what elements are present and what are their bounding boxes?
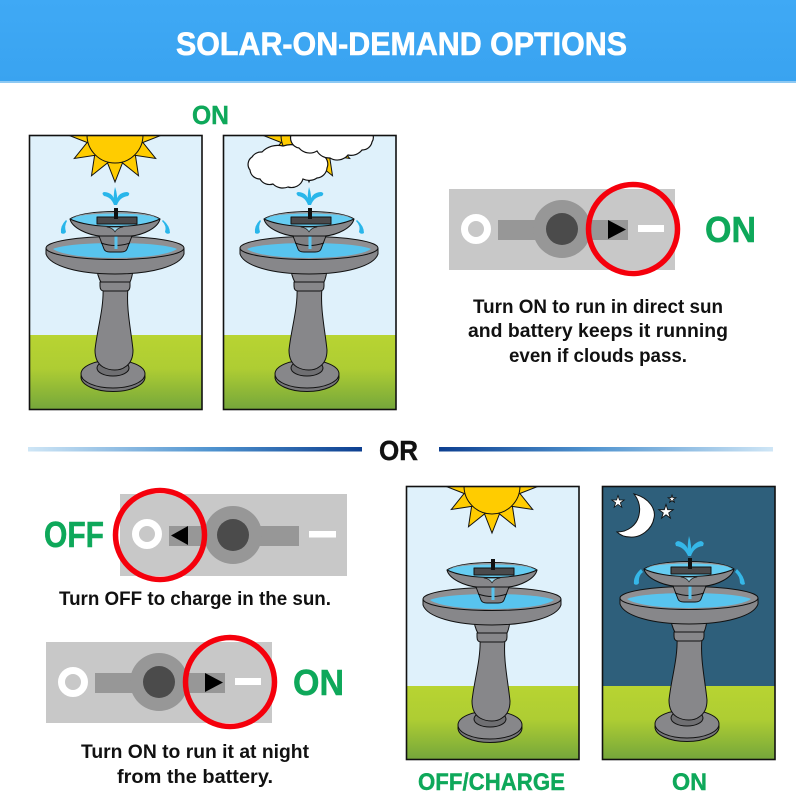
text block: direct sun instructions: Turn ON to run in direct sun bbox=[473, 297, 723, 318]
red highlight circle bbox=[186, 638, 274, 726]
divider: OR: OR bbox=[379, 435, 418, 466]
header banner bbox=[0, 0, 796, 83]
icon: moon bbox=[617, 494, 654, 537]
red highlight circle bbox=[588, 184, 678, 274]
text block: night instructions: from the battery. bbox=[117, 767, 273, 788]
label: OFF (switch): OFF bbox=[44, 514, 104, 555]
text block: direct sun instructions: even if clouds pass. bbox=[509, 346, 687, 367]
red highlight circle bbox=[116, 490, 204, 580]
label: ON (top): ON bbox=[192, 100, 229, 130]
water jets bbox=[634, 536, 745, 585]
text: charge instruction: Turn OFF to charge in the sun. bbox=[59, 589, 331, 610]
arrow: pointing left bbox=[171, 526, 188, 545]
panel: fountain with clouds passing bbox=[223, 107, 396, 410]
divider: OR bbox=[28, 435, 773, 466]
text block: direct sun instructions bbox=[468, 297, 728, 367]
arrow: pointing right bbox=[205, 673, 223, 692]
panel: fountain running at night bbox=[602, 486, 775, 760]
text block: direct sun instructions: and battery keeps it running bbox=[468, 321, 728, 342]
switch diagram: ON at night bbox=[46, 638, 274, 726]
label: ON (night panel): ON bbox=[672, 769, 707, 796]
label: ON (night switch): ON bbox=[293, 662, 344, 703]
title: SOLAR-ON-DEMAND OPTIONS bbox=[176, 26, 627, 62]
arrow: pointing right bbox=[608, 220, 626, 239]
switch diagram: OFF bbox=[116, 490, 347, 580]
panel: fountain in direct sun bbox=[29, 107, 202, 410]
icon: clouds bbox=[248, 133, 373, 188]
label: OFF/CHARGE: OFF/CHARGE bbox=[418, 769, 565, 796]
text block: night instructions bbox=[81, 742, 310, 788]
text block: night instructions: Turn ON to run it at night bbox=[81, 742, 310, 763]
panel: fountain charging in sun bbox=[406, 458, 579, 760]
icon: stars bbox=[612, 495, 676, 518]
switch diagram: ON bbox=[449, 184, 678, 274]
label: ON (switch): ON bbox=[705, 209, 756, 250]
